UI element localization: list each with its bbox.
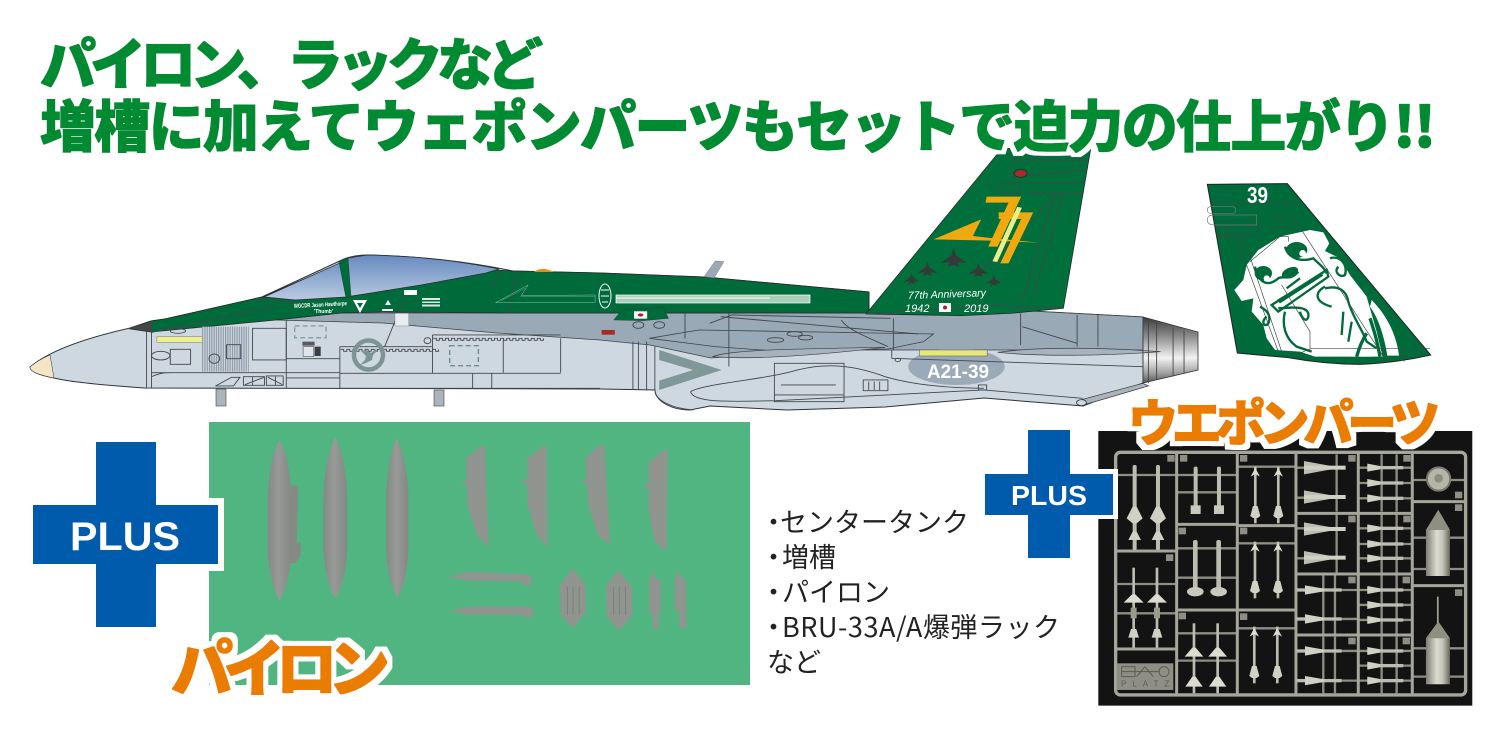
plus cross left: [33, 442, 224, 627]
engine nozzle: [1143, 317, 1198, 383]
PLATZ logo plate: [1117, 663, 1173, 690]
long stripe marking: [616, 295, 810, 303]
blue cross: [985, 430, 1113, 558]
fin panel lines: [1207, 203, 1430, 363]
shisa lion-dog: [1234, 230, 1399, 357]
black background: [1098, 431, 1472, 706]
dark grey upper fuselage: [276, 310, 1143, 358]
pilot name markings: [294, 290, 440, 315]
title line 2: 増槽に加えてウェポンパーツもセットで迫力の仕上がり!!: [40, 83, 1436, 164]
disc and cone parts: [1426, 467, 1450, 684]
canopy frame: [339, 258, 351, 298]
contents list: センタータンク: [780, 501, 969, 540]
missile pods: [712, 347, 885, 358]
sprue frame and runners: [1116, 452, 1466, 695]
contents list: ・: [760, 536, 787, 575]
second tail fin with shisa: [1207, 184, 1431, 364]
tail number 39: 39: [1247, 182, 1268, 208]
pilot name markings: WGCDR Jason Hawthorpe: [294, 301, 347, 310]
canopy: [264, 255, 499, 300]
plus cross right: [985, 430, 1118, 558]
aircraft side view: [30, 148, 1198, 410]
contents list: ・: [760, 501, 787, 540]
part number tabs: [1166, 455, 1462, 644]
wing: [649, 330, 933, 352]
panel: pylon photo: [209, 422, 750, 685]
plus label: PLUS: [70, 515, 180, 559]
dorsal antenna: [704, 261, 724, 278]
landing gear stubs: [216, 389, 444, 406]
orange fairing: [534, 269, 553, 272]
contents list: [760, 501, 1060, 680]
drop tanks: [268, 437, 408, 601]
chevron marking: [659, 350, 722, 390]
white outline: [1028, 469, 1118, 519]
white outline: [96, 498, 224, 571]
tail fin shape: [1207, 184, 1431, 364]
arresting hook: [1077, 383, 1148, 406]
small missiles: [649, 570, 686, 629]
contents list: ・: [760, 571, 787, 610]
serial number: A21-39: [927, 362, 989, 383]
pylon orange label: パイロン: [171, 619, 390, 709]
vertical tail on aircraft: [866, 148, 1091, 316]
anniversary lettering: 1942: [905, 303, 929, 315]
weapon parts orange label: ウエポンパーツ: [1128, 384, 1440, 456]
contents list: 増槽: [782, 536, 836, 575]
contents list: BRU-33A/A爆弾ラック: [782, 606, 1060, 645]
aft fuselage, wing and pods: [602, 261, 1184, 410]
jet silhouettes: [904, 248, 1002, 286]
pylon flag patch: [614, 307, 669, 321]
red tail light: [1014, 169, 1027, 177]
bomb racks: [560, 568, 633, 631]
RAAF kangaroo roundel: [354, 340, 383, 370]
anniversary lettering: 77th Anniversary: [908, 287, 987, 302]
spine arrow marking: [496, 285, 595, 303]
green photo background: [209, 422, 750, 685]
plus label: PLUS: [1011, 480, 1087, 511]
nose cone: [30, 355, 54, 378]
anniversary lettering: [905, 287, 988, 315]
shisa spine emblem: [599, 284, 611, 308]
gold 77 anniversary emblem: [933, 197, 1039, 263]
antiglare nose patch: [130, 322, 151, 332]
pilot name markings: 'Thumb': [314, 309, 333, 315]
missiles: [1124, 461, 1403, 693]
contents list: など: [767, 641, 821, 680]
launcher rails: [448, 572, 533, 617]
fuselage body: [30, 255, 1143, 410]
title line 1: パイロン、ラックなど: [40, 21, 543, 102]
PLATZ logo plate: PLATZ: [1121, 680, 1169, 689]
pylon and tank parts: [268, 437, 686, 631]
yellow formation strip: [920, 350, 987, 356]
panel: weapon sprue photo: [1098, 431, 1472, 706]
contents list: パイロン: [782, 571, 890, 610]
blue cross: [33, 442, 218, 627]
pylons: [462, 445, 667, 552]
nose and forward fuselage details: [147, 272, 600, 388]
contents list: ・: [760, 606, 787, 645]
title: [40, 21, 1436, 164]
anniversary lettering: 2019: [963, 303, 988, 315]
tail number oval: [908, 348, 1005, 385]
green upper fuselage: [130, 262, 869, 332]
